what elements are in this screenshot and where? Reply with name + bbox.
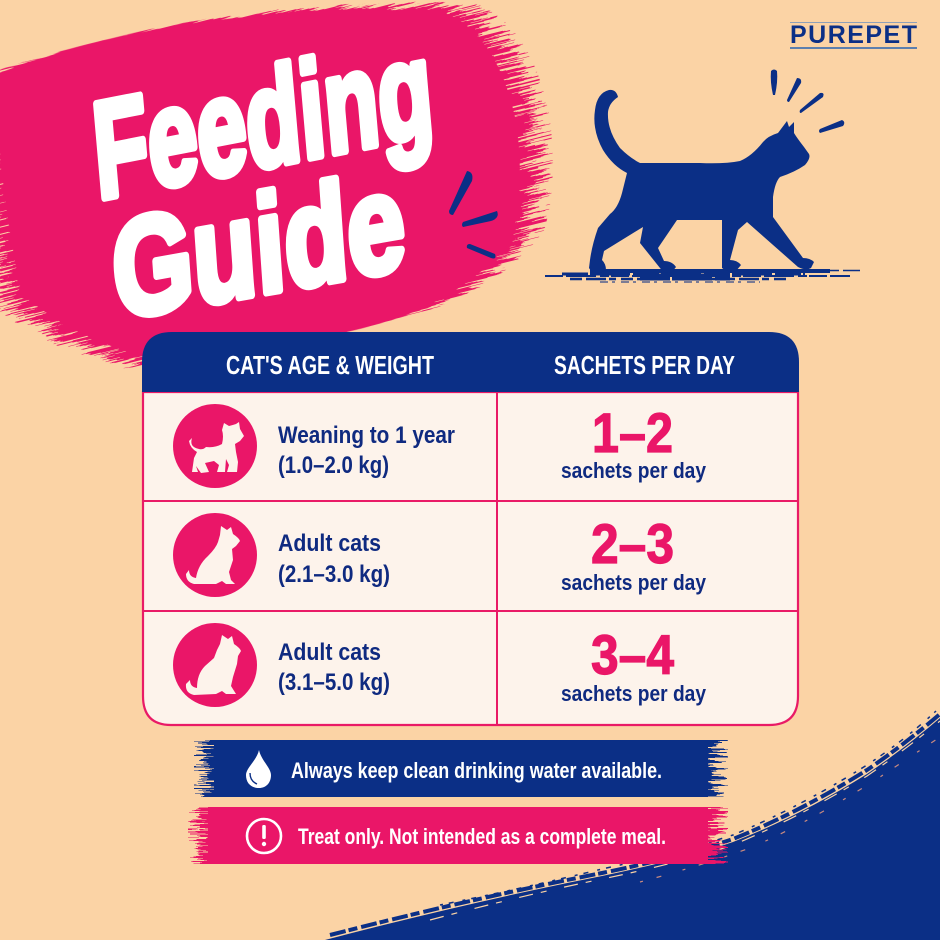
row 1 age text: Weaning to 1 year — [278, 422, 455, 449]
row 3 sachet label: sachets per day — [561, 681, 706, 706]
header label: sachets per day: SACHETS PER DAY — [554, 350, 735, 380]
icon: kitten — [173, 404, 257, 488]
pink brush blob behind title — [0, 0, 620, 495]
icon: sitting large cat — [173, 623, 257, 707]
treat warning text: Treat only. Not intended as a complete meal. — [298, 824, 666, 849]
icon: water drop — [246, 750, 271, 788]
title: Feeding Guide — [87, 10, 438, 349]
row 2 weight text: (2.1–3.0 kg) — [278, 561, 390, 588]
brand logo: PUREPET: PUREPET — [790, 21, 917, 49]
title line: Guide: Guide — [107, 144, 410, 349]
row 1 sachet number: 1–2 — [592, 401, 673, 464]
row 3 sachet number: 3–4 — [591, 623, 674, 686]
table divider lines — [143, 392, 798, 725]
table header bar — [142, 332, 799, 392]
row 3 age text: Adult cats — [278, 639, 381, 666]
icon: walking cat silhouette — [589, 90, 814, 273]
icon: sitting cat — [173, 513, 257, 597]
navy brush swoosh bottom right — [325, 711, 940, 940]
navy banner background — [204, 740, 718, 797]
row 2: adult cat — [173, 512, 706, 597]
ground brush stroke under cat — [545, 270, 860, 282]
row 3: larger adult cat — [173, 623, 706, 707]
row 1: kitten — [173, 401, 706, 488]
row 3 weight text: (3.1–5.0 kg) — [278, 669, 390, 696]
water reminder text: Always keep clean drinking water available. — [291, 758, 662, 783]
row 2 sachet label: sachets per day — [561, 570, 706, 595]
panel: feeding table — [142, 332, 799, 725]
icon: title accent ticks — [449, 171, 498, 258]
pink banner background — [198, 807, 718, 864]
icon: cat attention ticks — [771, 70, 844, 133]
row 2 age text: Adult cats — [278, 530, 381, 557]
header label: age and weight: CAT'S AGE & WEIGHT — [226, 350, 434, 380]
row 1 weight text: (1.0–2.0 kg) — [278, 452, 389, 479]
table body — [143, 392, 798, 725]
row 2 sachet number: 2–3 — [591, 512, 674, 575]
icon: exclamation circle — [247, 819, 281, 853]
row 1 sachet label: sachets per day — [561, 458, 706, 483]
